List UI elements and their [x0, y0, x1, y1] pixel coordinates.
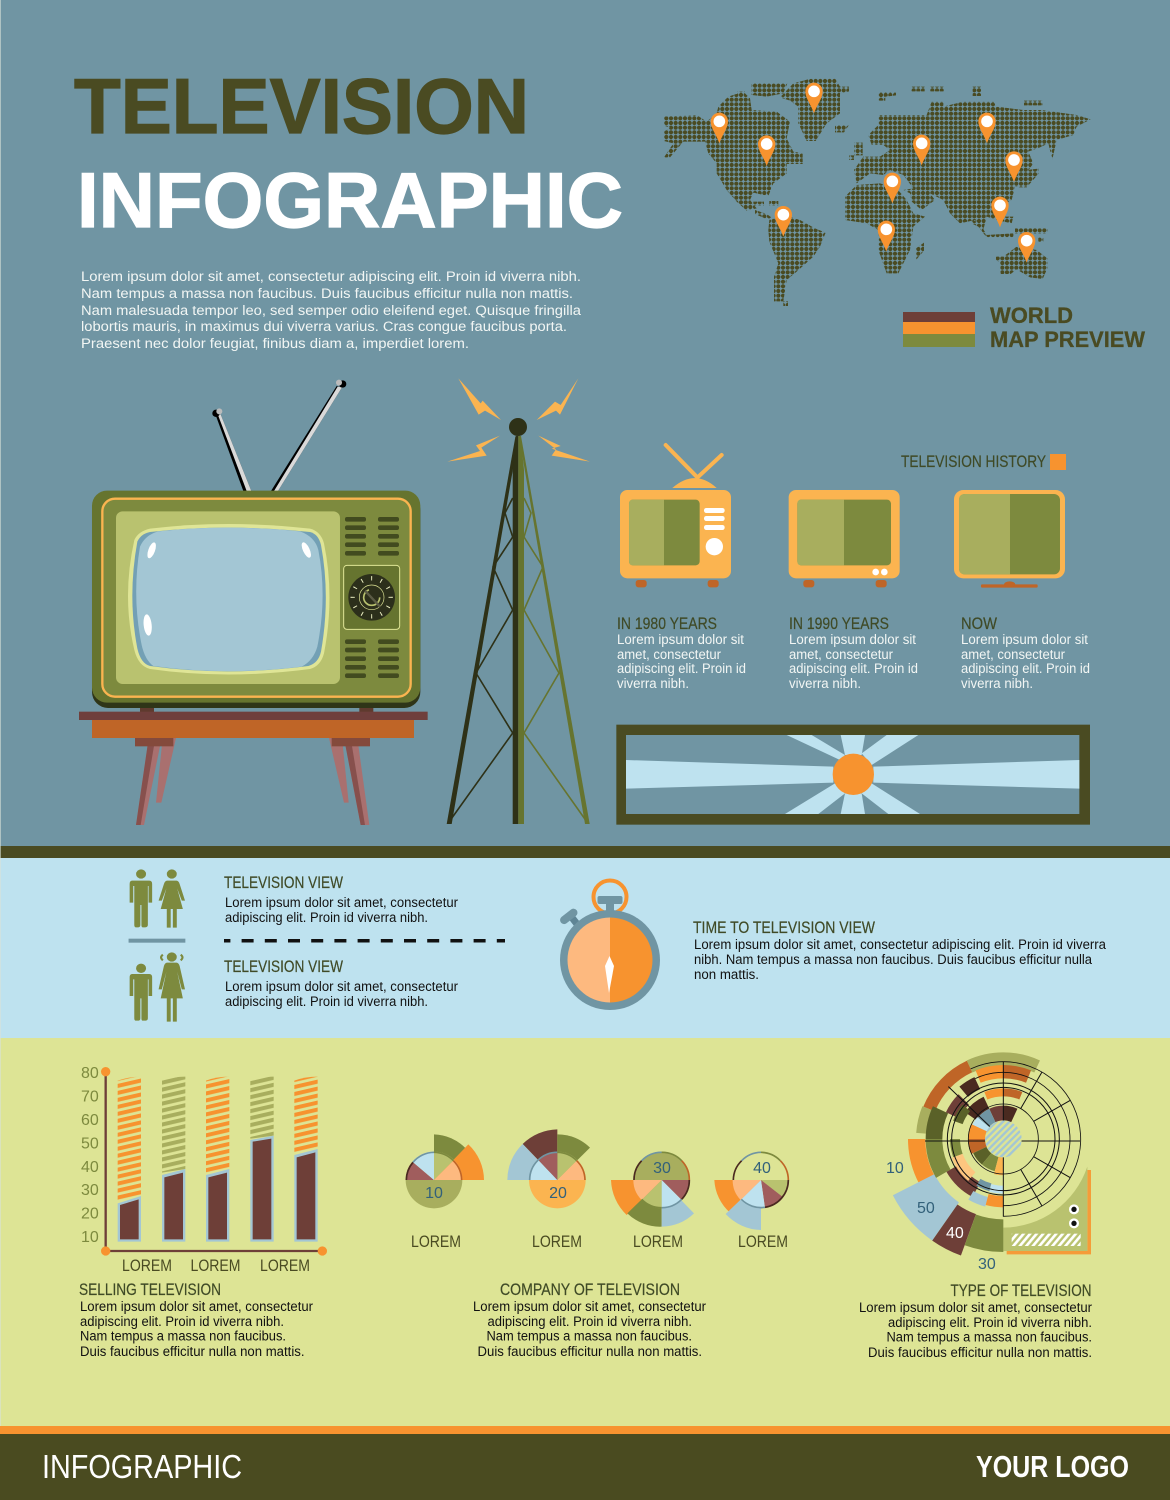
text block: in 1980 years: Lorem ipsum dolor sit	[617, 632, 744, 647]
icon: map pin 7	[884, 173, 901, 203]
text block: television view 1: Lorem ipsum dolor sit amet, consectetur	[225, 895, 458, 910]
pie values: 20	[549, 1185, 567, 1202]
radial values: 10	[886, 1160, 904, 1177]
text block: type of television: Lorem ipsum dolor sit amet, consectetur	[859, 1300, 1092, 1315]
text block: selling television: Duis faucibus efficitur nulla non mattis.	[80, 1344, 304, 1359]
text block: introduction: Nam malesuada tempor leo, sed semper odio eleifend eget. Quisque fringilla	[81, 303, 582, 318]
icon: lightning bolts	[447, 378, 590, 462]
tower legs	[447, 436, 590, 824]
footer title: INFOGRAPHIC	[42, 1448, 242, 1485]
icon: man and woman	[130, 869, 185, 928]
icon: map pin 10	[991, 197, 1009, 227]
x axis labels: LOREM	[190, 1257, 240, 1275]
y axis labels: 50	[81, 1136, 99, 1152]
pie values: 30	[653, 1160, 671, 1177]
text block: selling television: adipiscing elit. Proin id viverra nibh.	[80, 1314, 284, 1329]
icon: 1980 television	[620, 445, 731, 587]
icons: television generations	[620, 445, 1065, 588]
icon: boy and girl	[130, 952, 185, 1022]
text block: television view 2: adipiscing elit. Proin id viverra nibh.	[225, 994, 428, 1009]
text block: time to television view	[693, 918, 1106, 982]
icon: map pin 4	[913, 135, 930, 165]
icon: stopwatch	[558, 880, 660, 1010]
text block: selling television: SELLING TELEVISION	[79, 1280, 221, 1299]
icons: viewer figures	[129, 869, 185, 1022]
x axis labels: LOREM	[122, 1257, 172, 1275]
chart bars	[101, 1067, 327, 1256]
text block: company of television: COMPANY OF TELEVISION	[500, 1280, 680, 1299]
y axis labels: 60	[81, 1112, 99, 1129]
text block: television view 2: Lorem ipsum dolor sit amet, consectetur	[225, 979, 458, 994]
pie labels: LOREM	[633, 1233, 683, 1251]
illustration: broadcast tower	[447, 378, 590, 824]
speaker vents	[345, 517, 399, 678]
hatched hub	[985, 1121, 1022, 1157]
text block: type of television: adipiscing elit. Proin id viverra nibh.	[888, 1315, 1092, 1330]
text block: company of television	[473, 1280, 706, 1359]
text block: selling television	[79, 1280, 313, 1359]
section: header background	[0, 0, 1170, 846]
icon: map pin 6	[1005, 151, 1023, 182]
text block: television view 1	[224, 873, 458, 925]
text block: type of television	[859, 1281, 1092, 1360]
pie 20	[507, 1129, 590, 1208]
text block: company of television: Lorem ipsum dolor sit amet, consectetur	[473, 1299, 706, 1314]
icon: map pin 9	[878, 221, 895, 251]
tuning dial	[344, 565, 400, 629]
text block: company of television: Duis faucibus efficitur nulla non mattis.	[478, 1344, 702, 1359]
title	[74, 62, 623, 244]
pie labels: LOREM	[532, 1233, 582, 1251]
heading: world map preview	[990, 303, 1145, 352]
text block: television view 2: TELEVISION VIEW	[224, 957, 343, 976]
radial values: 40	[946, 1225, 964, 1242]
tower beacon	[509, 418, 527, 436]
map: dotted continents	[652, 76, 1117, 305]
text block: time to television view: nibh. Nam tempus a massa non faucibus. Duis faucibus efficitur nulla	[694, 952, 1092, 967]
text block: now: amet, consectetur	[961, 647, 1065, 662]
text block: company of television: adipiscing elit. Proin id viverra nibh.	[488, 1314, 692, 1329]
text block: in 1980 years: IN 1980 YEARS	[617, 614, 717, 633]
icon: map pin 8	[775, 206, 792, 237]
radial values: 50	[917, 1200, 935, 1217]
pie labels: LOREM	[411, 1233, 461, 1251]
y axis labels: 70	[81, 1088, 99, 1106]
text block: now	[961, 614, 1090, 691]
tower braces	[449, 498, 587, 822]
text block: in 1980 years	[617, 614, 746, 691]
pie 10	[406, 1134, 484, 1208]
text block: television view 1: adipiscing elit. Proin id viverra nibh.	[225, 910, 428, 925]
pie values: 10	[425, 1185, 443, 1202]
icon: modern television	[954, 490, 1065, 588]
text block: type of television: Duis faucibus efficitur nulla non mattis.	[868, 1345, 1092, 1360]
y axis labels: 30	[81, 1182, 99, 1199]
pie 30	[611, 1152, 694, 1227]
antennas	[212, 380, 346, 491]
chart corner panel	[1003, 1167, 1091, 1254]
text block: in 1990 years	[789, 614, 918, 691]
bar chart: selling television	[81, 1065, 327, 1275]
divider bar	[129, 939, 185, 943]
text block: introduction: Praesent nec dolor feugiat, finibus diam a, imperdiet lorem.	[81, 336, 469, 351]
text block: selling television: Lorem ipsum dolor sit amet, consectetur	[80, 1299, 313, 1314]
text block: now: NOW	[961, 614, 997, 633]
title: INFOGRAPHIC	[77, 156, 623, 244]
text block: introduction: lobortis mauris, in maximus dui viverra varius. Cras congue faucibus porta.	[81, 319, 567, 334]
footer	[0, 1426, 1170, 1500]
y axis labels	[81, 1065, 99, 1246]
text block: in 1980 years: adipiscing elit. Proin id	[617, 661, 746, 676]
text block: in 1990 years: Lorem ipsum dolor sit	[789, 632, 916, 647]
pie values	[425, 1160, 771, 1202]
icon: map pin 11	[1018, 232, 1035, 263]
icon: map pin 5	[978, 113, 996, 143]
radial chart: type of television	[863, 999, 1144, 1279]
text block: in 1980 years: amet, consectetur	[617, 647, 721, 662]
band: dark divider	[0, 846, 1170, 858]
text block: now: adipiscing elit. Proin id	[961, 661, 1090, 676]
radial wedges	[863, 999, 1144, 1279]
pie 40	[714, 1152, 789, 1230]
text block: selling television: Nam tempus a massa non faucibus.	[80, 1328, 286, 1344]
y axis labels: 80	[81, 1065, 99, 1082]
text block: introduction: Nam tempus a massa non faucibus. Duis faucibus efficitur nulla non mattis.	[81, 286, 573, 301]
x axis labels	[122, 1257, 310, 1275]
heading: television history: TELEVISION HISTORY	[901, 452, 1046, 471]
y axis labels: 10	[81, 1229, 99, 1246]
text block: time to television view: non mattis.	[694, 967, 759, 982]
text block: in 1990 years: amet, consectetur	[789, 647, 893, 662]
radial values: 30	[978, 1256, 996, 1273]
footer logo: YOUR LOGO	[976, 1449, 1129, 1484]
section: viewing band background	[0, 858, 1170, 1038]
table	[79, 706, 428, 825]
text block: type of television: TYPE OF TELEVISION	[950, 1281, 1092, 1300]
title: TELEVISION	[74, 62, 529, 150]
text block: television view 2	[224, 957, 458, 1009]
icon: 1990 television	[789, 490, 900, 587]
pie values: 40	[753, 1160, 771, 1177]
television cabinet	[92, 491, 420, 708]
text block: in 1980 years: viverra nibh.	[617, 676, 689, 691]
text block: now: Lorem ipsum dolor sit	[961, 632, 1088, 647]
text block: type of television: Nam tempus a massa non faucibus.	[886, 1330, 1092, 1344]
section: charts background	[0, 1038, 1170, 1426]
y axis labels: 20	[81, 1206, 99, 1222]
panel: sunburst frame	[616, 725, 1090, 825]
text block: company of television: Nam tempus a massa non faucibus.	[486, 1328, 692, 1344]
heading: world map preview: MAP PREVIEW	[990, 327, 1145, 352]
icon: map pin 3	[758, 135, 775, 166]
x axis labels: LOREM	[260, 1257, 310, 1275]
illustration: retro television on table	[79, 380, 428, 825]
text block: time to television view: Lorem ipsum dolor sit amet, consectetur adipiscing elit. Proin id viverra	[694, 937, 1106, 952]
radial grid	[901, 1036, 1106, 1242]
text block: now: viverra nibh.	[961, 676, 1033, 691]
world map	[652, 76, 1117, 305]
pie labels: LOREM	[738, 1233, 788, 1251]
y axis labels: 40	[81, 1159, 99, 1176]
text block: television view 1: TELEVISION VIEW	[224, 873, 343, 892]
text block: introduction	[81, 269, 582, 351]
legend: map flag	[903, 312, 975, 347]
text block: time to television view: TIME TO TELEVISION VIEW	[693, 918, 875, 937]
heading: world map preview: WORLD	[990, 303, 1073, 328]
screen	[128, 524, 329, 674]
text block: in 1990 years: adipiscing elit. Proin id	[789, 661, 918, 676]
text block: introduction: Lorem ipsum dolor sit amet, consectetur adipiscing elit. Proin id viverra nibh.	[81, 269, 581, 284]
text block: in 1990 years: IN 1990 YEARS	[789, 614, 889, 633]
radial values	[886, 1160, 996, 1273]
pie labels	[411, 1233, 788, 1251]
icon: map pin 2	[711, 113, 728, 143]
icon: map pin 1	[805, 83, 823, 113]
text block: in 1990 years: viverra nibh.	[789, 676, 861, 691]
pie charts: company of television	[406, 1129, 789, 1251]
